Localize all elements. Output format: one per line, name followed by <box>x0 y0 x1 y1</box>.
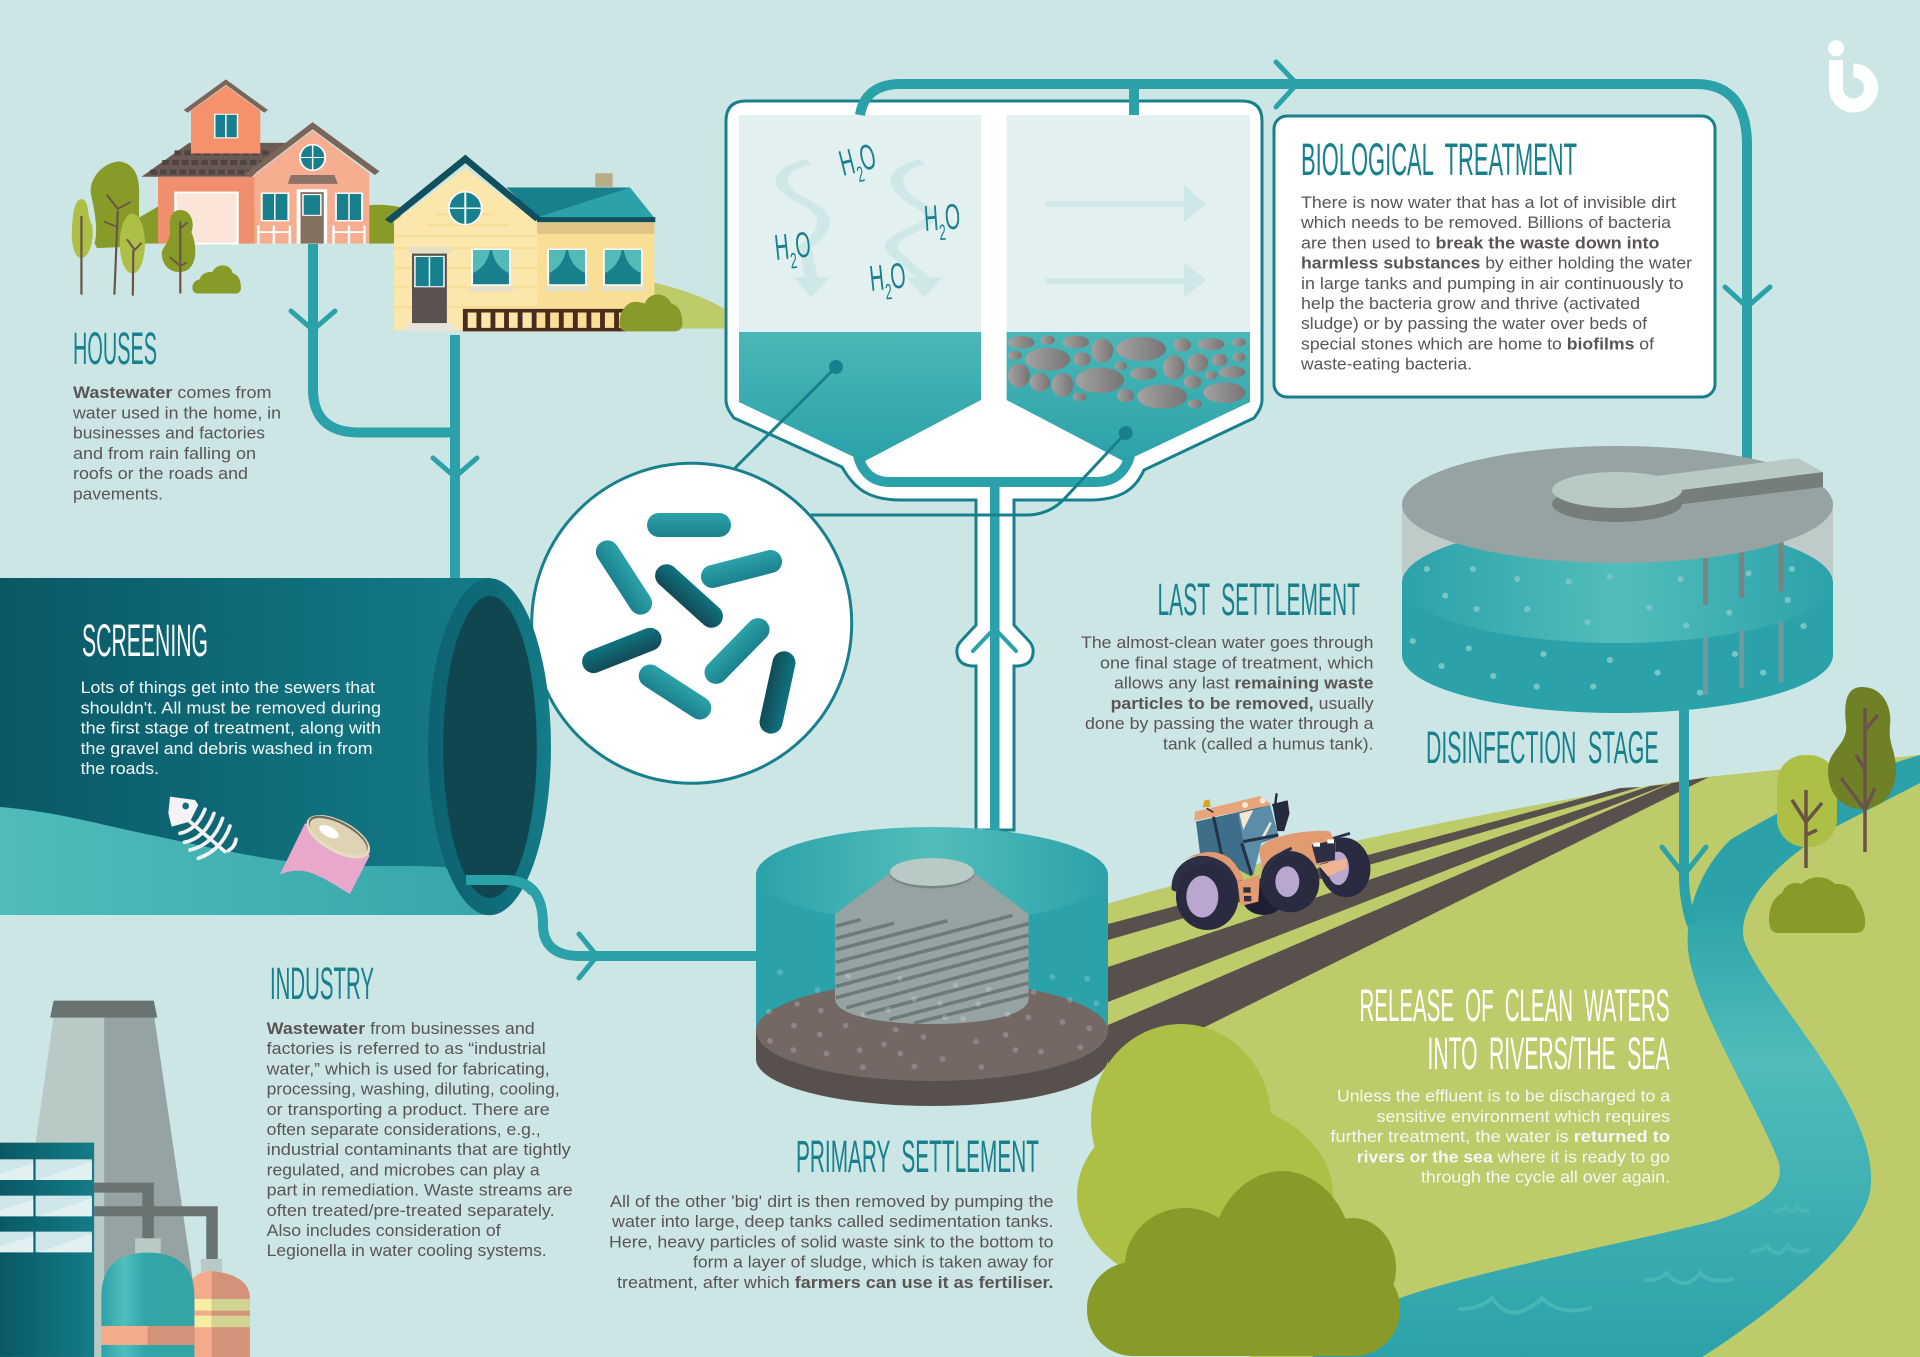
far wheel <box>1315 833 1375 901</box>
text: release of clean waters: rivers or the sea where it is ready to go <box>1357 1147 1670 1166</box>
riverside trees and bush <box>1769 687 1896 933</box>
text: biological treatment: in large tanks and pumping in air continuously to <box>1301 274 1684 293</box>
H2O labels: O <box>888 254 908 297</box>
text: biological treatment: waste-eating bacteria. <box>1300 355 1472 374</box>
text: houses: and from rain falling on <box>73 444 256 463</box>
H2O labels: O <box>855 135 880 179</box>
house 2 <box>388 159 725 331</box>
rear wheel <box>1176 863 1239 930</box>
foreground bushes <box>1077 1024 1400 1356</box>
text: houses <box>72 383 281 504</box>
text: industry: often treated/pre-treated separately. <box>267 1201 555 1220</box>
text: screening: shouldn't. All must be removed during <box>81 698 381 717</box>
rear fender <box>1172 855 1243 897</box>
field roads <box>1108 777 1709 1075</box>
text: screening <box>81 678 381 778</box>
text: last settlement: The almost-clean water goes through <box>1081 633 1374 652</box>
text: biological treatment: are then used to break the waste down into <box>1301 233 1660 252</box>
H2O labels <box>773 135 962 306</box>
text: industry: Wastewater from businesses and <box>267 1019 535 1038</box>
text: last settlement: one final stage of treatment, which <box>1100 653 1374 672</box>
text: houses: water used in the home, in <box>72 403 281 422</box>
infographic canvas: LAST SETTLEMENT <box>1158 574 1360 625</box>
heading: release of clean waters <box>1360 980 1670 1079</box>
text: release of clean waters: Unless the effluent is to be discharged to a <box>1337 1087 1671 1106</box>
H2O labels: H <box>773 224 803 268</box>
river <box>1312 755 1920 1357</box>
filter stones <box>1008 335 1246 409</box>
text: primary settlement: water into large, deep tanks called sedimentation tanks. <box>611 1212 1054 1231</box>
river waves <box>1460 1207 1808 1313</box>
connecting pipes <box>94 1188 212 1260</box>
text: houses: businesses and factories <box>73 424 265 443</box>
green field <box>1100 755 1920 1357</box>
text: last settlement: allows any last remaining waste <box>1114 674 1374 693</box>
biological tanks <box>726 101 1262 832</box>
text: biological treatment: special stones which are home to biofilms of <box>1301 334 1654 353</box>
text: houses: roofs or the roads and <box>73 464 248 483</box>
text: biological treatment: harmless substances by either holding the water <box>1301 254 1692 273</box>
bacteria magnifier <box>532 463 852 783</box>
text: biological treatment: help the bacteria grow and thrive (activated <box>1301 294 1640 313</box>
teal tank <box>101 1238 194 1357</box>
text: industry: Also includes consideration of <box>267 1221 501 1240</box>
H2O labels: 2 <box>789 248 798 273</box>
text: industry: regulated, and microbes can play a <box>267 1160 540 1179</box>
panel: biological treatment <box>1274 116 1715 397</box>
infographic canvas: HOUSES <box>73 323 157 374</box>
water bubbles <box>1410 566 1807 696</box>
pipe: tank to river with arrow <box>1662 710 1706 925</box>
text: biological treatment: There is now water that has a lot of invisible dirt <box>1301 193 1676 212</box>
text: screening: the first stage of treatment, along with <box>81 719 381 738</box>
factory building <box>0 1143 94 1357</box>
text: screening: the roads. <box>81 759 159 778</box>
text: release of clean waters: further treatment, the water is returned to <box>1330 1127 1670 1146</box>
text: release of clean waters <box>1330 1087 1671 1186</box>
logo <box>1828 40 1871 105</box>
text: primary settlement <box>609 1192 1054 1292</box>
factory illustration <box>0 1001 250 1357</box>
text: last settlement: done by passing the water through a <box>1085 714 1374 733</box>
house 1 <box>95 82 402 244</box>
text: biological treatment: sludge) or by passing the water over beds of <box>1301 314 1647 333</box>
H2O labels: H <box>923 196 951 239</box>
text: industry: Legionella in water cooling systems. <box>267 1241 547 1260</box>
H2O labels: 2 <box>884 279 893 304</box>
front wheel <box>1256 846 1324 917</box>
railing <box>463 309 626 330</box>
infographic canvas: INDUSTRY <box>270 958 374 1009</box>
text: biological treatment: which needs to be removed. Billions of bacteria <box>1300 213 1672 232</box>
swirl arrows <box>782 162 943 297</box>
text: industry: factories is referred to as “industrial <box>267 1039 546 1058</box>
text: primary settlement: treatment, after which farmers can use it as fertiliser. <box>617 1273 1054 1292</box>
text: screening: the gravel and debris washed in from <box>81 739 373 758</box>
panel: biological treatment: BIOLOGICAL TREATMENT <box>1301 134 1577 185</box>
H2O labels: 2 <box>854 161 867 187</box>
cab <box>1196 805 1278 877</box>
text: industry: often separate considerations, e.g., <box>267 1120 541 1139</box>
H2O labels: 2 <box>938 220 947 245</box>
sewer pipe <box>0 578 551 915</box>
text: biological treatment <box>1300 193 1692 374</box>
text: last settlement: particles to be removed, usually <box>1111 694 1374 713</box>
text: industry <box>266 1019 573 1260</box>
H2O labels: H <box>868 255 898 299</box>
infographic canvas: PRIMARY SETTLEMENT <box>796 1131 1039 1182</box>
text: industry: part in remediation. Waste streams are <box>267 1181 573 1200</box>
rotating arm <box>1552 458 1823 522</box>
sewer pipe: SCREENING <box>82 615 208 666</box>
pipe: houses to sewer <box>291 244 477 580</box>
sewer water <box>0 807 491 915</box>
icon: tin can <box>280 806 377 894</box>
text: houses: Wastewater comes from <box>73 383 272 402</box>
text: release of clean waters: sensitive environment which requires <box>1376 1107 1670 1126</box>
left trees <box>72 161 241 296</box>
text: primary settlement: form a layer of sludge, which is taken away for <box>693 1253 1054 1272</box>
text: screening: Lots of things get into the sewers that <box>81 678 375 697</box>
text: industry: processing, washing, diluting, cooling, <box>267 1080 560 1099</box>
orange tank <box>188 1259 250 1357</box>
text: last settlement <box>1081 633 1374 754</box>
pipe mouth <box>428 578 551 915</box>
text: industry: water,” which is used for fabricating, <box>266 1059 550 1078</box>
front weight <box>1318 858 1347 877</box>
pipe: sewer to primary settlement <box>466 880 760 978</box>
submerged rods <box>1706 622 1781 695</box>
text: houses: pavements. <box>73 484 163 504</box>
H2O labels: O <box>793 223 813 266</box>
text: industry: or transporting a product. There are <box>267 1100 550 1119</box>
chimney <box>23 1001 193 1357</box>
hood <box>1259 831 1335 877</box>
text: primary settlement: Here, heavy particles of solid waste sink to the bottom to <box>609 1232 1054 1251</box>
pointer lines to bacteria <box>735 360 1133 515</box>
pipe: under tank and down <box>858 456 1130 832</box>
icon: fish bones <box>168 797 236 858</box>
H2O labels: O <box>943 196 961 238</box>
infographic canvas: DISINFECTION STAGE <box>1426 722 1659 773</box>
tractor <box>1172 793 1375 930</box>
houses illustration <box>72 82 725 331</box>
text: last settlement: tank (called a humus tank). <box>1163 734 1374 754</box>
tank lid <box>1402 446 1833 563</box>
settling cone <box>835 858 1029 1024</box>
text: release of clean waters: through the cycle all over again. <box>1421 1168 1670 1186</box>
text: primary settlement: All of the other 'big' dirt is then removed by pumping the <box>610 1192 1054 1211</box>
H2O labels: H <box>835 138 870 184</box>
text: industry: industrial contaminants that are tightly <box>267 1140 571 1159</box>
pipe: top loop with arrows <box>860 62 1770 460</box>
sediment dots <box>766 969 1099 1070</box>
disinfection tank <box>1402 446 1833 713</box>
flow arrows <box>1045 185 1206 298</box>
primary settlement tank <box>756 827 1108 1106</box>
